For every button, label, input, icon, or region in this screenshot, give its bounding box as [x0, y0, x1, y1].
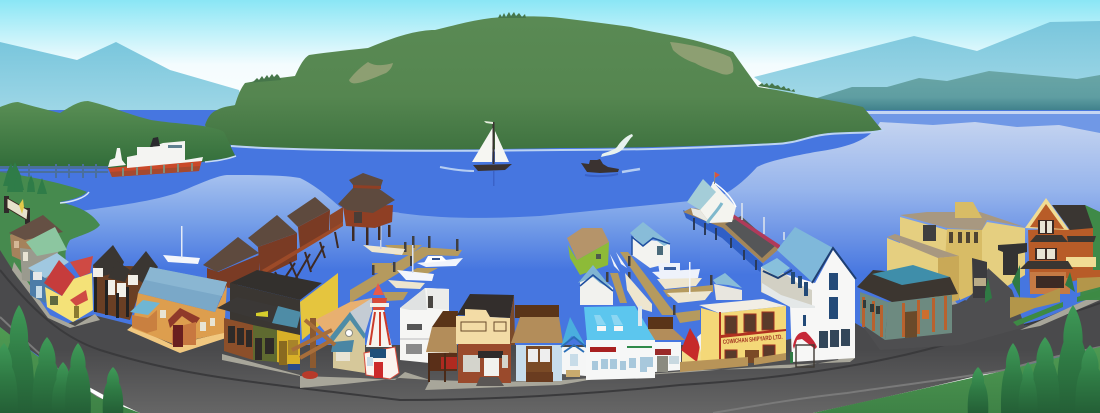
boat: sailboat moored [163, 226, 200, 264]
sky [0, 0, 1100, 130]
teal roof building [857, 265, 958, 340]
gangway [330, 207, 343, 232]
big green hill [205, 12, 884, 151]
lattice fence and hedge [1010, 265, 1100, 326]
tan roof cottage [315, 298, 372, 373]
Cowichan shipyard building [680, 299, 786, 372]
small blue roof hut [713, 273, 742, 300]
white modern building [400, 288, 449, 365]
yellow wall [300, 273, 338, 340]
tower [352, 225, 390, 245]
beige building [887, 202, 1027, 305]
water reflection: left sky [60, 175, 700, 300]
hill treetops [247, 12, 795, 92]
left mountains [0, 42, 250, 130]
tugboat [581, 134, 640, 176]
welcome sign [4, 196, 30, 224]
left thatch building [426, 311, 458, 382]
white house with blue roof [630, 222, 670, 268]
ship [108, 137, 203, 177]
big motor boat [652, 263, 700, 283]
water reflection: right sky [600, 122, 1100, 290]
road [0, 250, 1100, 413]
victorian house [1020, 198, 1100, 294]
annex thatch building [648, 317, 685, 372]
boat: cream small [388, 280, 425, 289]
shed 2 [258, 233, 297, 278]
black roof shop row [217, 270, 322, 367]
left bank [0, 162, 100, 300]
tan western storefront [456, 294, 515, 386]
blue-gray front house [578, 265, 613, 305]
sidewalk [12, 262, 1100, 390]
small blue gable house [561, 317, 586, 377]
right dark mountain [817, 71, 1100, 111]
red and white roof cottage [681, 328, 720, 365]
trees bottom left [0, 305, 123, 413]
left marina dock [350, 236, 462, 303]
shipyard sign text: COWICHAN SHIPYARD LTD. [723, 334, 783, 346]
lighthouse [364, 283, 399, 379]
pier with boathouse [683, 172, 784, 272]
white tall building [761, 227, 856, 367]
far dock [0, 164, 108, 178]
kayaks [610, 252, 627, 272]
boat: white motor yacht [417, 256, 463, 267]
long moored boat [625, 273, 652, 312]
road lobe to beige building [862, 268, 1025, 350]
small trees [3, 162, 47, 194]
grass bottom left [0, 327, 140, 413]
shed 1 [207, 255, 259, 288]
left house 2: green roof [20, 227, 67, 285]
boat: white sailboat [397, 245, 434, 281]
left house 1: brown [9, 215, 63, 262]
trees bottom right [968, 305, 1100, 413]
left green hill [0, 101, 236, 172]
green bank behind east houses [1080, 205, 1100, 300]
hill bald patch right [670, 42, 733, 75]
left house 4: yellow with red roof [44, 256, 93, 322]
right thatch building [511, 305, 563, 382]
sailboat right 1 [657, 278, 702, 289]
dark timber sheds [93, 245, 158, 320]
orange blue-roof building [127, 267, 227, 353]
right mountains [754, 21, 1100, 112]
water [0, 110, 1100, 370]
totem timber frame [288, 318, 335, 379]
left house 3: blue [28, 253, 69, 303]
pier sheds [203, 173, 395, 288]
road stripes [0, 270, 1100, 400]
dark sign wall [972, 258, 992, 303]
green house [567, 228, 609, 275]
shoreline highlight [231, 130, 884, 151]
hill bald patch left [349, 62, 393, 83]
boat: cream sailboat [363, 223, 405, 255]
light blue store [584, 306, 655, 380]
right marina dock [606, 252, 713, 323]
grass bottom right [813, 347, 1100, 413]
sailboat [440, 121, 512, 186]
shed 3 [298, 210, 330, 249]
sailboat right 2 [667, 262, 712, 303]
